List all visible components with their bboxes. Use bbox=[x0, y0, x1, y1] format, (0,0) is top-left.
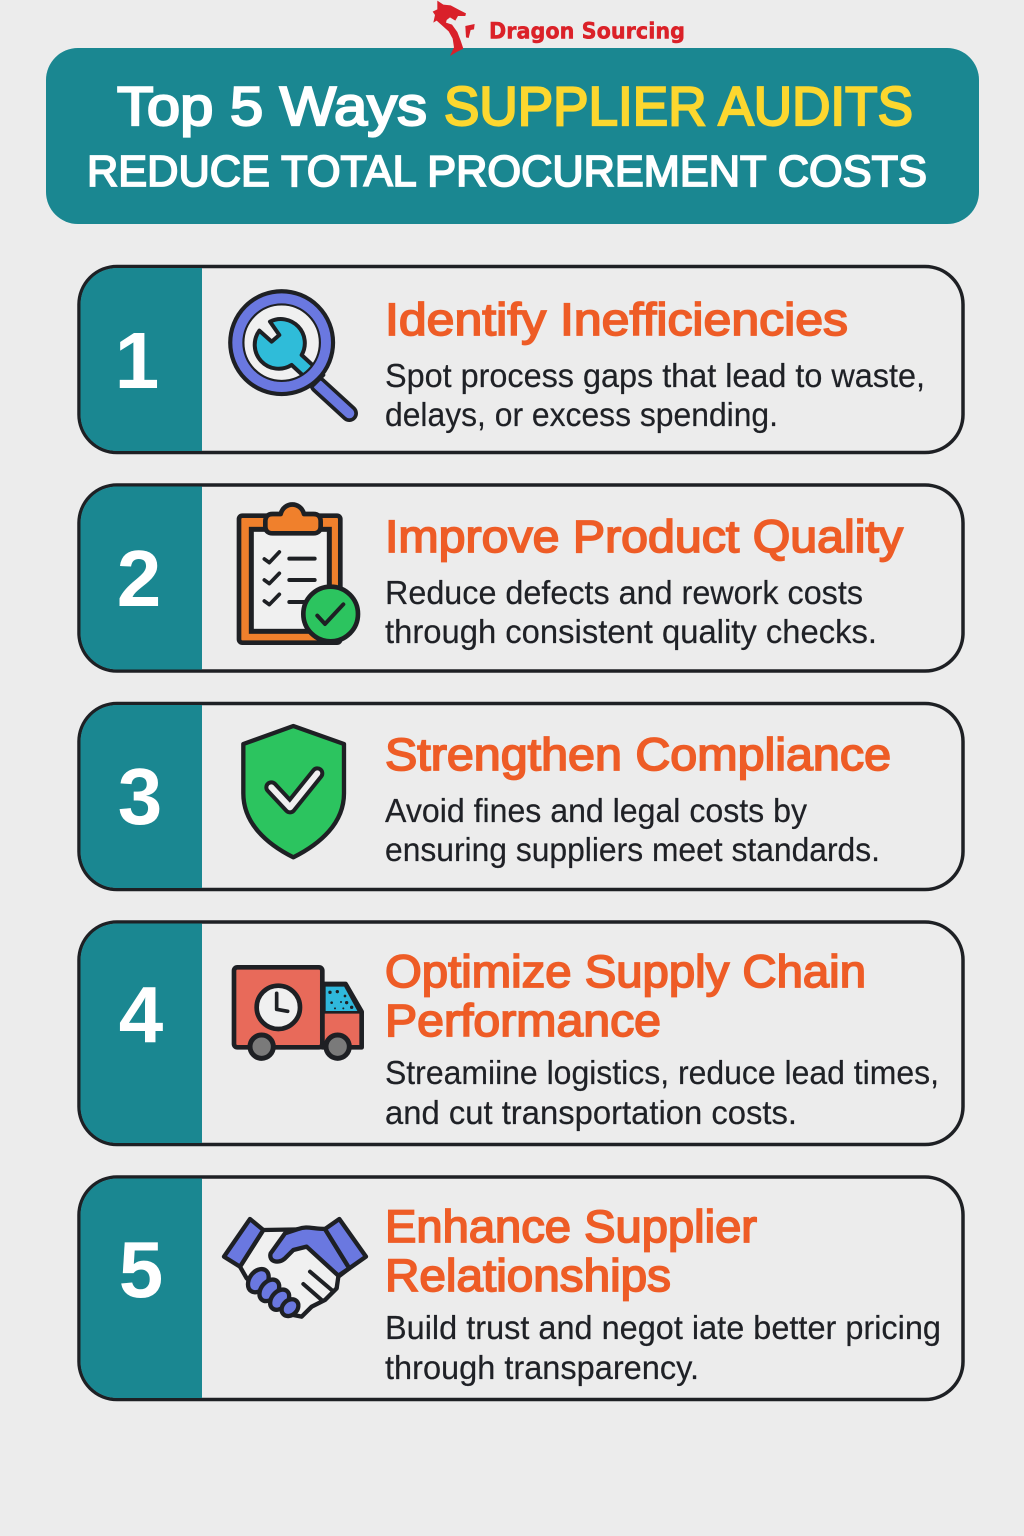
card outline bbox=[79, 704, 963, 890]
number tab bbox=[80, 705, 202, 888]
description: Build trust and negot iate better pricing bbox=[385, 1309, 941, 1346]
description: Reduce defects and rework costs bbox=[385, 574, 863, 611]
panel: 1 Identify Inefficiencies bbox=[79, 266, 963, 452]
icon: red dragon bbox=[433, 1, 475, 56]
card outline bbox=[79, 1177, 963, 1400]
description: Streamiine logistics, reduce lead times, bbox=[385, 1054, 939, 1091]
description: Avoid fines and legal costs by bbox=[385, 792, 807, 829]
panel: 5 Enhance Supplier Relationships bbox=[79, 1177, 963, 1400]
icon: clipboard checklist bbox=[239, 504, 358, 643]
card outline bbox=[79, 922, 963, 1144]
icon: delivery truck with clock bbox=[234, 967, 362, 1058]
icon: magnifying glass with wrench bbox=[236, 297, 349, 413]
number tab bbox=[80, 268, 202, 451]
description: through consistent quality checks. bbox=[385, 613, 877, 650]
icon: green shield with check bbox=[243, 726, 344, 857]
number 3: 3 bbox=[118, 752, 162, 841]
description: ensuring suppliers meet standards. bbox=[385, 831, 880, 868]
logo: Dragon Sourcing bbox=[433, 1, 685, 56]
number tab bbox=[80, 486, 202, 670]
number 2: 2 bbox=[117, 534, 161, 623]
number tab bbox=[80, 924, 202, 1143]
card outline bbox=[79, 266, 963, 452]
number tab bbox=[80, 1178, 202, 1398]
number 5: 5 bbox=[119, 1225, 163, 1314]
description: delays, or excess spending. bbox=[385, 396, 778, 433]
icon: handshake bbox=[224, 1219, 366, 1319]
number 1: 1 bbox=[115, 316, 159, 405]
title line 1: SUPPLIER AUDITS bbox=[444, 75, 913, 137]
title line 2: REDUCE TOTAL PROCUREMENT COSTS bbox=[87, 147, 927, 196]
description: and cut transportation costs. bbox=[385, 1094, 797, 1131]
heading: Strengthen Compliance bbox=[385, 729, 891, 780]
card outline bbox=[79, 485, 963, 671]
heading: Improve Product Quality bbox=[385, 511, 904, 562]
number 4: 4 bbox=[119, 970, 164, 1059]
panel: 2 Improve Product Quality bbox=[79, 485, 963, 671]
logo wordmark: Dragon Sourcing bbox=[489, 20, 685, 44]
heading: Performance bbox=[385, 995, 661, 1046]
heading: Enhance Supplier bbox=[385, 1201, 757, 1252]
heading: Relationships bbox=[385, 1250, 671, 1301]
title banner bbox=[46, 48, 979, 224]
title line 1: Top 5 Ways bbox=[117, 75, 427, 137]
panel: 4 Optimize Supply Chain Performance bbox=[79, 922, 963, 1144]
description: Spot process gaps that lead to waste, bbox=[385, 357, 925, 394]
heading: Identify Inefficiencies bbox=[385, 294, 848, 345]
banner background bbox=[46, 48, 979, 224]
description: through transparency. bbox=[385, 1349, 699, 1386]
heading: Optimize Supply Chain bbox=[385, 946, 866, 997]
panel: 3 Strengthen Compliance bbox=[79, 704, 963, 890]
